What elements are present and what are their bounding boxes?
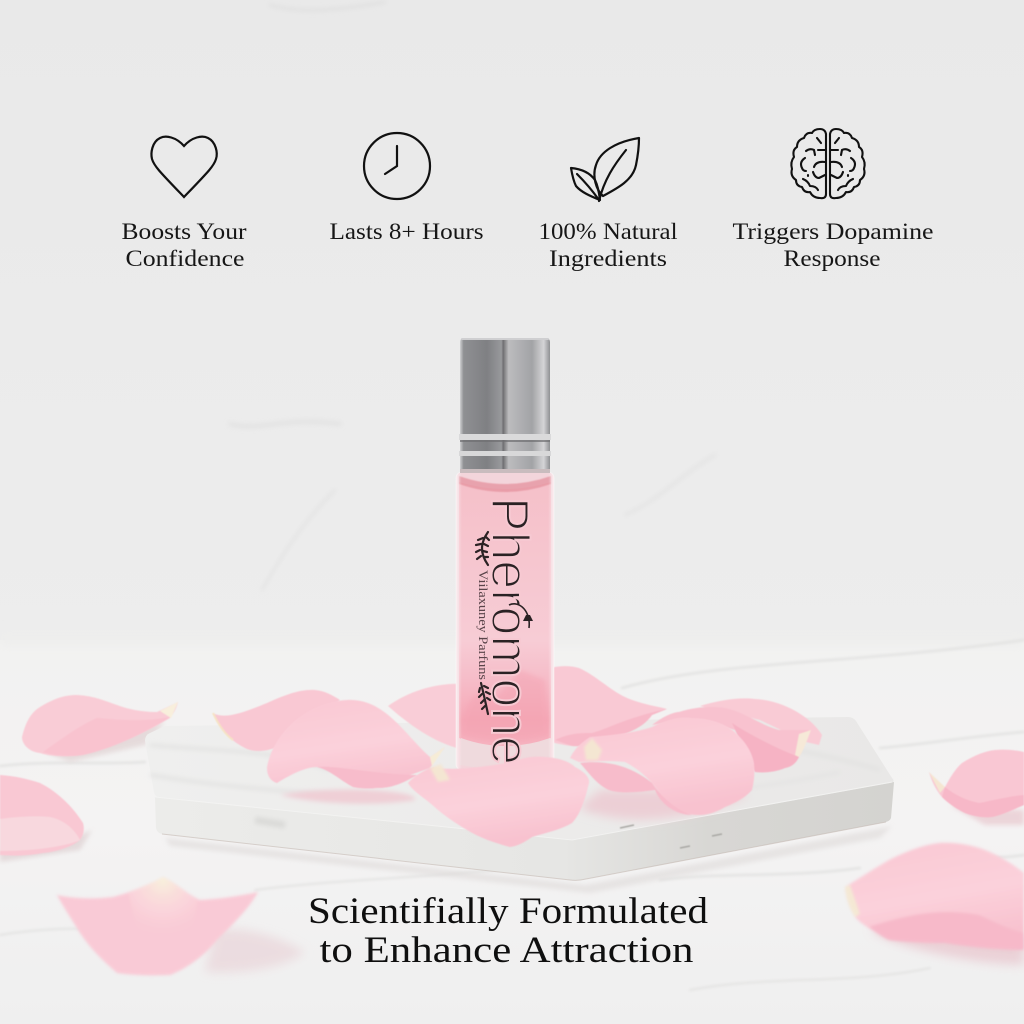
slab side: [155, 782, 894, 880]
tagline: [308, 891, 709, 971]
text: natural ingredients: 100% Natural: [538, 219, 678, 245]
text: natural ingredients: Ingredients: [549, 246, 667, 272]
icon: heart: [151, 137, 217, 197]
petal: rear far right: [652, 698, 822, 772]
petal: front right on slab: [570, 717, 754, 815]
label: laurel bottom: [479, 683, 490, 714]
petal: front left on slab: [267, 700, 445, 788]
petal: bottom right: [845, 843, 1024, 950]
feature: boosts your confidence: [122, 137, 247, 272]
petal: back centre: [388, 684, 465, 750]
text: boosts your confidence: Boosts Your: [122, 219, 247, 245]
bottle: [456, 338, 554, 770]
label: sub text: Viilaxuney Parfuns: [476, 570, 490, 680]
petal: left middle: [0, 775, 84, 856]
petals in front: [0, 695, 1024, 975]
bottle cap: [459, 338, 551, 473]
bottle label: [476, 497, 539, 765]
icon: clock: [364, 133, 430, 199]
text: triggers dopamine response: Response: [784, 246, 880, 272]
text: lasts 8+ hours: Lasts 8+ Hours: [330, 219, 484, 245]
bottle liquid: [459, 482, 551, 747]
background wall: [0, 0, 1024, 650]
feature: triggers dopamine response: [732, 129, 934, 272]
marble slab: [145, 717, 894, 880]
petal: left upper: [22, 695, 178, 756]
text: triggers dopamine response: [732, 219, 934, 272]
petal: right middle: [929, 750, 1024, 817]
label: ring emblem: [509, 604, 533, 628]
petal: back right of bottle: [550, 666, 667, 746]
tagline: to Enhance Attraction: [320, 930, 694, 971]
text: boosts your confidence: [122, 219, 247, 272]
text: triggers dopamine response: Triggers Dopamine: [732, 219, 934, 245]
tagline: Scientifially Formulated: [308, 891, 709, 932]
icon: leaves: [571, 138, 639, 201]
marble table surface: [0, 640, 1024, 1024]
bottle glass: [456, 472, 554, 770]
icon: brain: [791, 129, 865, 198]
label: laurel top: [476, 532, 489, 565]
text: boosts your confidence: Confidence: [126, 246, 244, 272]
text: natural ingredients: [538, 219, 678, 272]
feature: lasts 8+ hours: [330, 133, 484, 245]
feature: natural ingredients: [538, 138, 678, 272]
petal: front centre: [408, 757, 589, 847]
slab top: [145, 717, 894, 840]
petal: back left: [213, 690, 340, 751]
petal: bottom left: [57, 877, 258, 975]
petals behind bottle: [213, 666, 822, 772]
shadows on table: [0, 722, 1024, 973]
label: brand name: Pheromone: [480, 497, 539, 765]
